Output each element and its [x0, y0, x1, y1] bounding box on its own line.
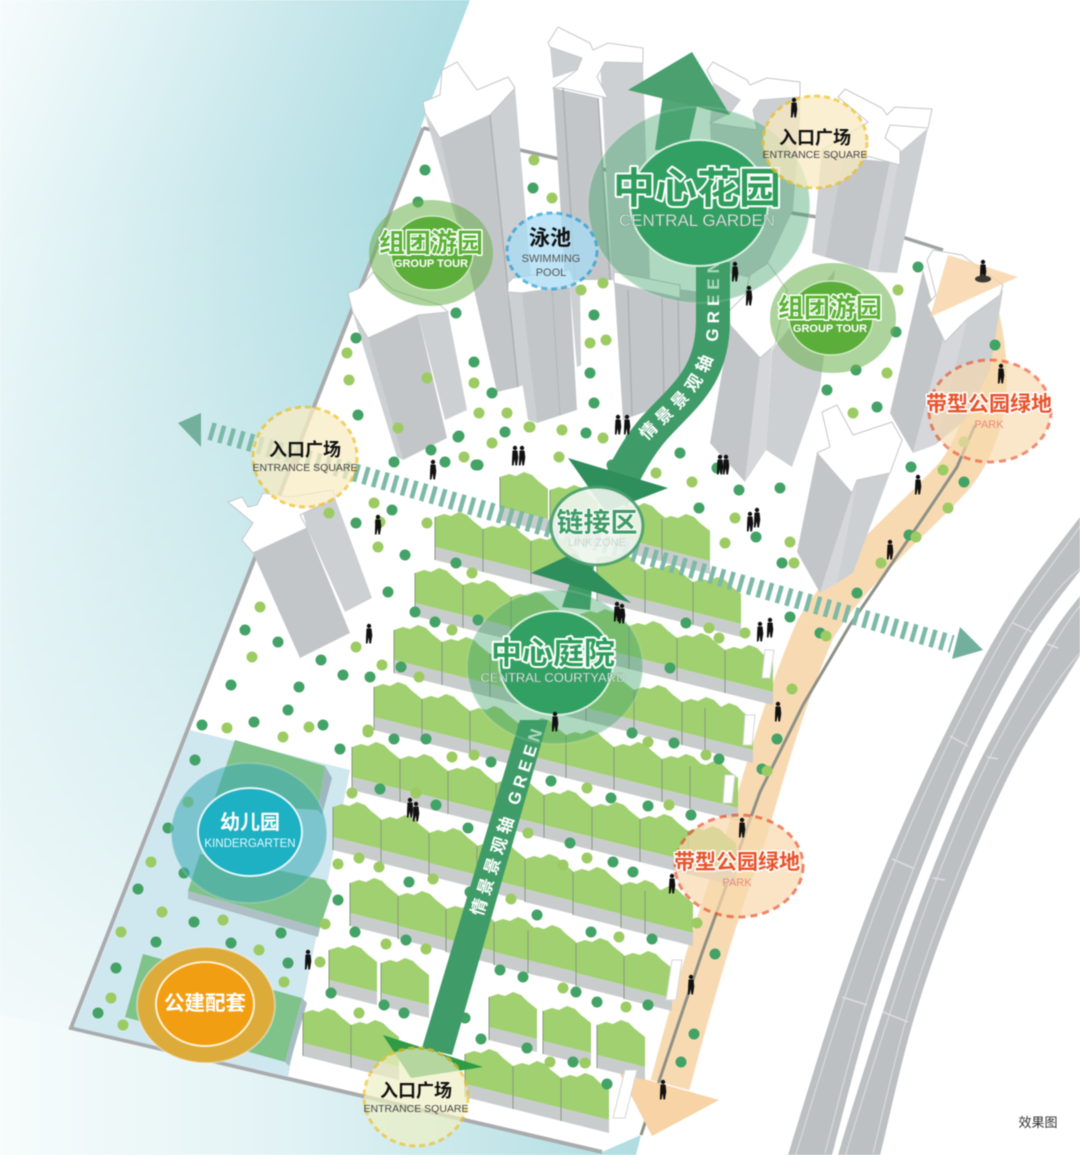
green axis: south, straight: [383, 553, 631, 1078]
tower 4: [348, 272, 467, 460]
badge: park belt south: PARK: [722, 877, 752, 889]
badge: central courtyard: CENTRAL COURTYARD: [481, 670, 625, 685]
axis label: south: 情景景观轴 GREEN: [468, 722, 548, 918]
badge: entrance square south: ENTRANCE SQUARE: [363, 1103, 469, 1115]
arrowhead: north: [628, 52, 730, 115]
tower 9: [890, 250, 1003, 453]
badge: central garden: 中心花园: [613, 165, 781, 212]
public facility building: [125, 954, 307, 1066]
badge: central courtyard: 中心庭院: [491, 636, 615, 671]
badge: group tour west: GROUP TOUR: [394, 258, 468, 270]
dashed east-west axis with arrows: [178, 413, 983, 659]
people silhouettes: [305, 98, 1004, 1100]
badge: group tour west: 组团游园: [379, 228, 483, 258]
tower 5: [614, 272, 722, 420]
kindergarten building south: [188, 854, 332, 937]
badge: swimming pool: SWIMMING: [522, 253, 580, 265]
badge: link zone: [551, 487, 643, 565]
park belt: peach path: [670, 300, 987, 1085]
badge: public facilities: [137, 947, 275, 1063]
arrowhead: into link zone from south: [531, 553, 631, 603]
park belt arrowhead: [930, 255, 1018, 317]
tower 2: [548, 27, 650, 280]
highway: [788, 517, 1080, 1155]
badge: central courtyard: [467, 590, 643, 744]
badge: group tour east: GROUP TOUR: [793, 323, 867, 335]
axis label: north: 情景景观轴 GREEN: [638, 264, 720, 441]
site boundary: [71, 128, 943, 1152]
tower 7: [812, 89, 932, 273]
badge: entrance square west: [252, 407, 358, 507]
townhouse rows: [303, 472, 773, 1133]
park belt lower arrowhead: [619, 1072, 719, 1136]
trees: [92, 154, 1000, 1090]
boundary line along park belt: [641, 425, 975, 1135]
badge: entrance square north-east: [762, 96, 868, 188]
green axis: north, curved: [568, 52, 731, 510]
badge: park belt north: 带型公园绿地: [926, 393, 1052, 416]
badge: link zone: 链接区: [556, 508, 638, 538]
row-end terrace outlines: [613, 650, 774, 1118]
badge: entrance square north-east: 入口广场: [779, 128, 851, 148]
badge: central garden: CENTRAL GARDEN: [619, 211, 775, 230]
badge: swimming pool: [507, 213, 597, 289]
arrowhead: into link zone: [568, 458, 668, 512]
badge: group tour west: [369, 200, 493, 306]
badge: group tour east: 组团游园: [778, 293, 882, 323]
badge: central garden: [588, 107, 810, 303]
kindergarten building north: [213, 740, 332, 815]
badge: park belt north: PARK: [974, 419, 1004, 431]
tower 3: [508, 270, 581, 423]
badge: swimming pool: POOL: [536, 267, 566, 279]
badge: group tour east: [770, 263, 896, 373]
badge: kindergarten: 幼儿园: [220, 811, 280, 834]
caption: 效果图: [1018, 1115, 1058, 1130]
badge: park belt south: [674, 815, 803, 917]
tower 11: [228, 490, 372, 658]
badge: park belt south: 带型公园绿地: [674, 851, 800, 874]
badge: entrance square west: 入口广场: [269, 440, 341, 460]
badge: public facilities: 公建配套: [164, 992, 246, 1015]
badge: park belt north: [926, 360, 1052, 462]
badge: entrance square north-east: ENTRANCE SQUARE: [762, 149, 868, 161]
badge: entrance square west: ENTRANCE SQUARE: [252, 462, 358, 474]
kindergarten zone: [74, 730, 350, 1077]
badge: kindergarten: KINDERGARTEN: [204, 838, 296, 850]
badge: link zone: LINK ZONE: [568, 537, 626, 549]
water: lower bank: [0, 1015, 641, 1155]
badge: swimming pool: 泳池: [529, 227, 571, 250]
badge: entrance square south: 入口广场: [380, 1081, 452, 1101]
water: river: [0, 0, 470, 1028]
tower 6: [707, 62, 800, 280]
tower 8: [710, 263, 835, 482]
tower 10: [797, 405, 902, 593]
arrowhead: south entrance: [383, 1035, 483, 1078]
tower 1: [423, 62, 536, 392]
badge: entrance square south: [363, 1048, 469, 1146]
badge: kindergarten: [171, 763, 327, 903]
